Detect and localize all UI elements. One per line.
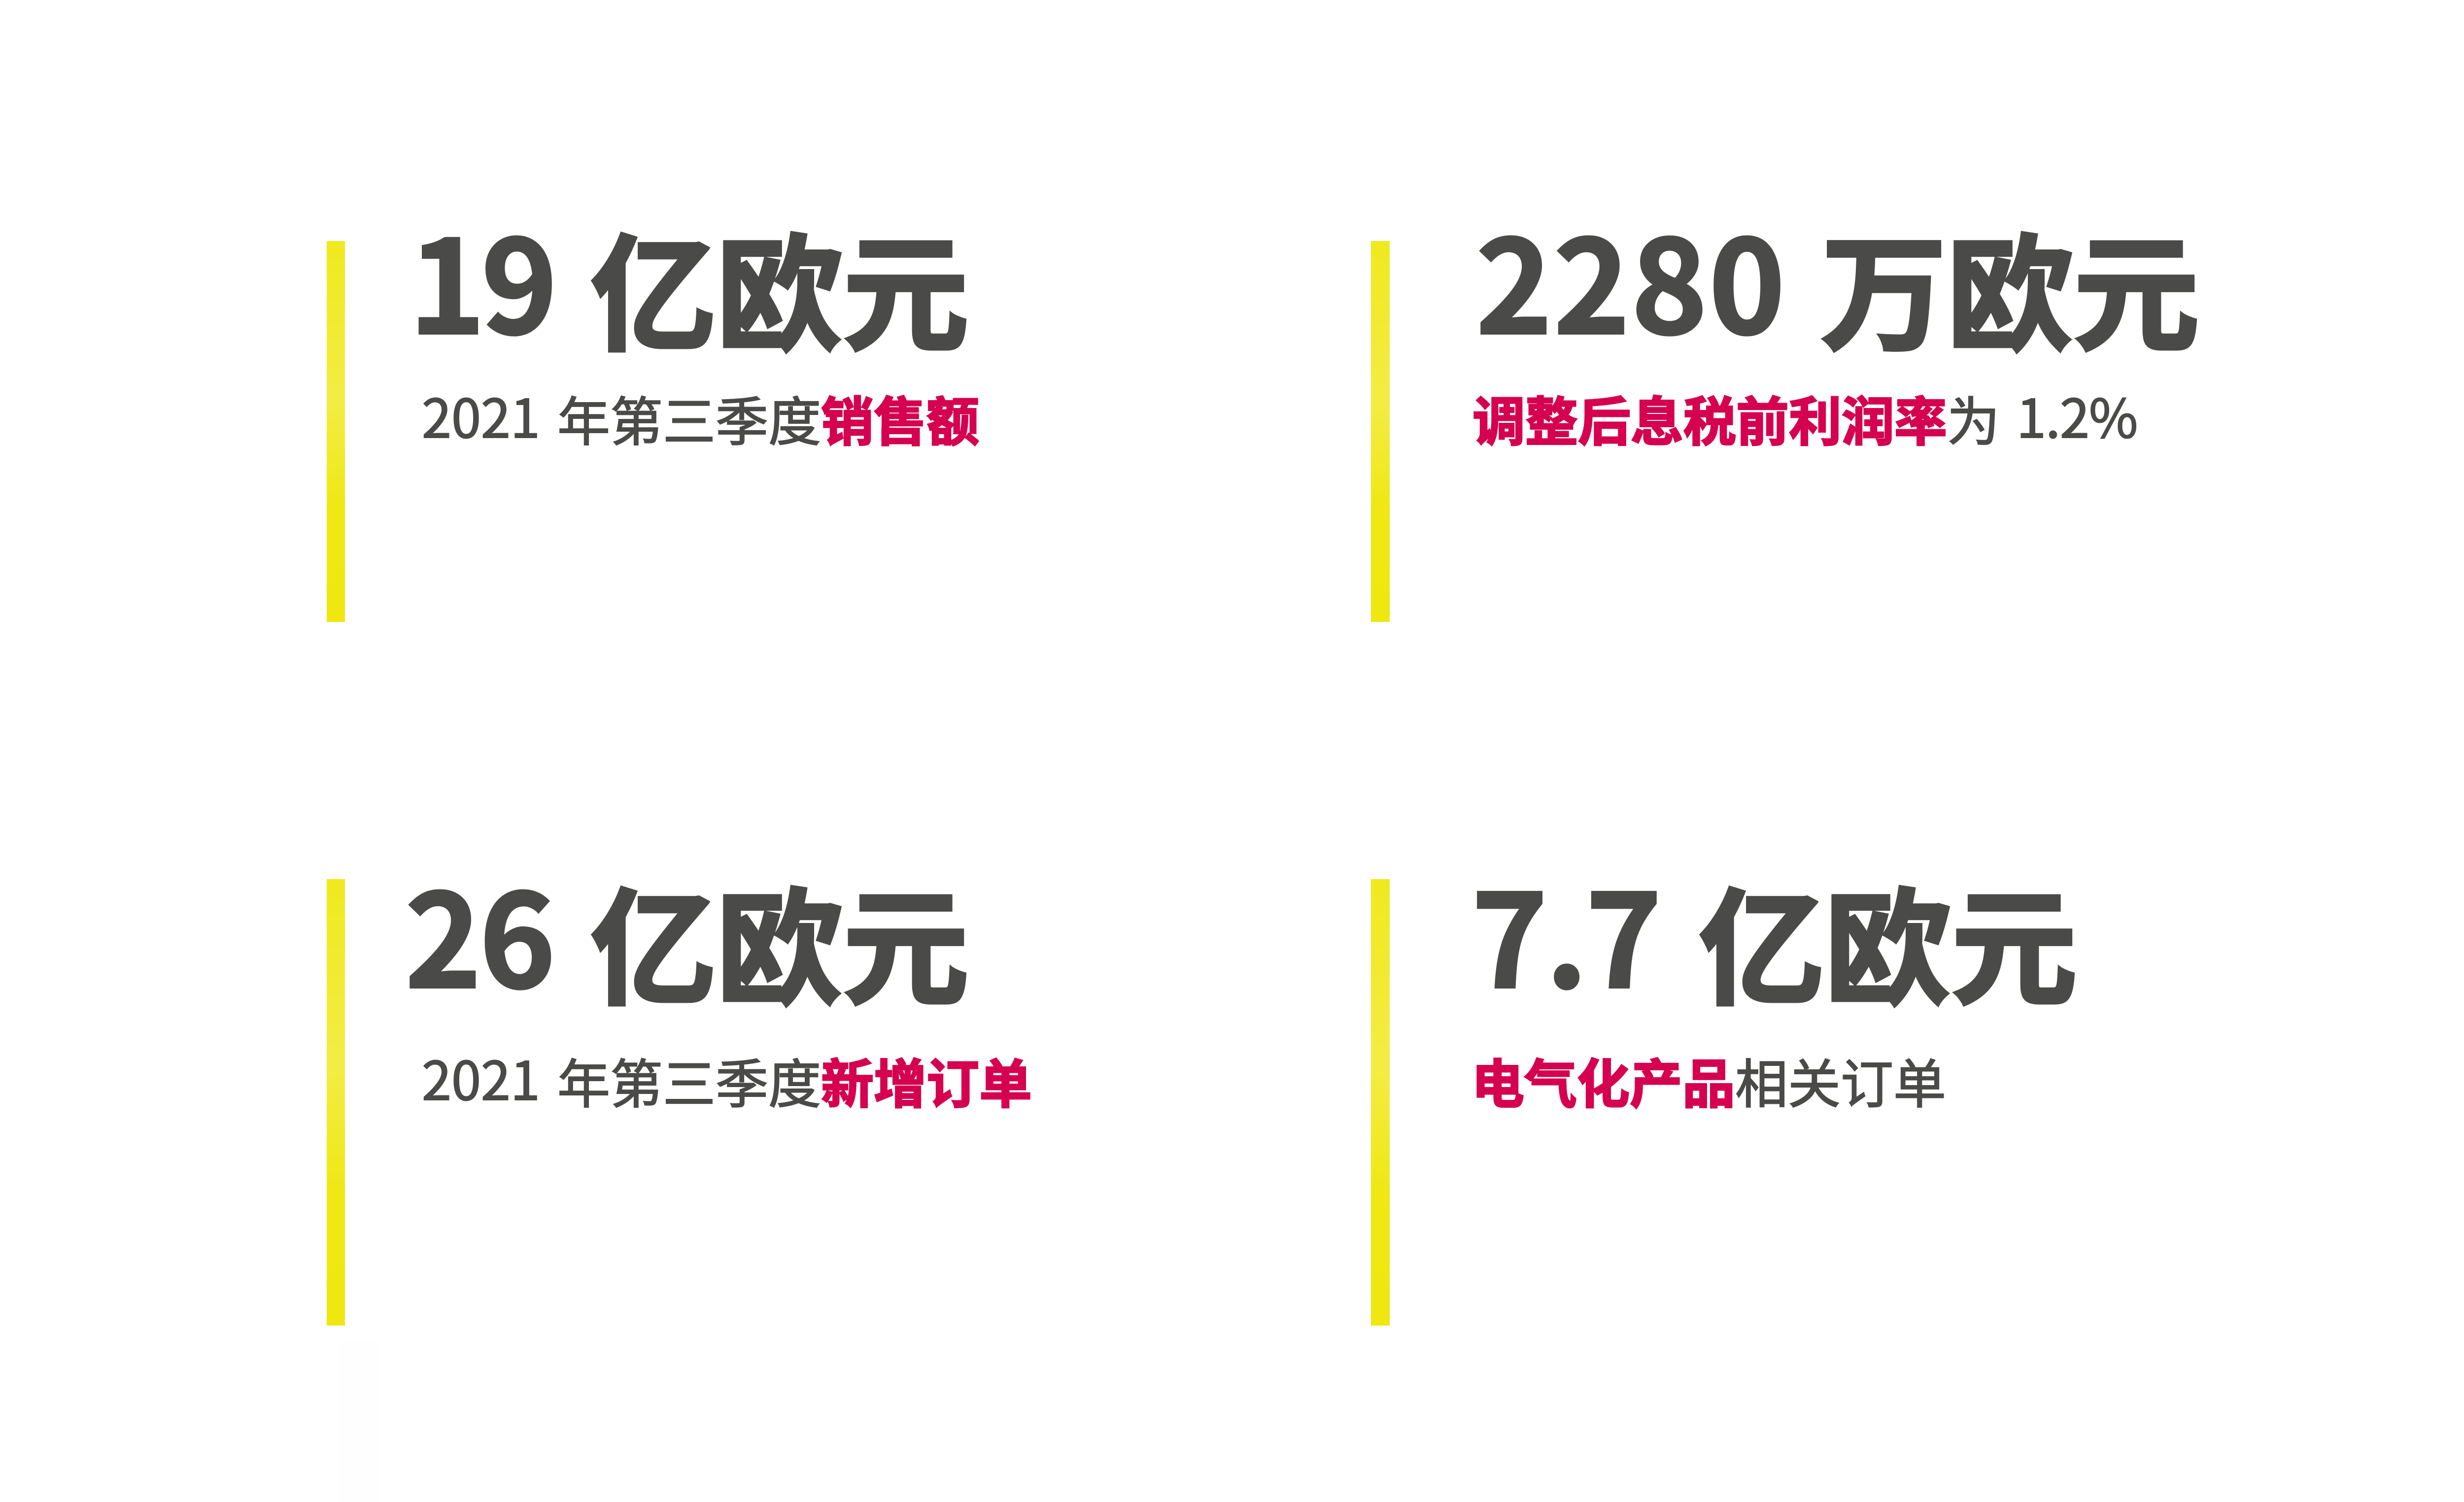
text: EBIT description: 调整后息税前利润率 (1472, 379, 1947, 456)
heading: EBIT figure: 2280 (1476, 184, 1786, 371)
text: EBIT description: 为 (1947, 379, 2000, 456)
heading: electrified figure: 亿欧元 (1699, 848, 2077, 1030)
heading: EBIT figure: 万欧元 (1821, 194, 2199, 376)
text: electrified description: 电气化产品 (1472, 1042, 1735, 1118)
heading: orders figure: 亿欧元 (590, 848, 969, 1030)
text: orders description: 2021 (422, 1039, 540, 1116)
accent bar: orders (327, 879, 345, 1326)
accent bar: electrified (1371, 879, 1390, 1326)
accent bar: sales (327, 241, 345, 622)
panel: sales (327, 184, 979, 622)
panel: adjusted EBIT margin (1371, 184, 2199, 622)
text: electrified description: 相关订单 (1735, 1042, 1946, 1118)
text: orders description: 年第三季度 (557, 1042, 821, 1118)
heading: electrified figure: 7.7 (1472, 838, 1660, 1025)
text: sales description: 年第三季度 (557, 379, 821, 456)
panel: electrified orders (1371, 838, 2077, 1326)
heading: orders figure: 26 (405, 838, 553, 1025)
text: sales description: 2021 (422, 376, 540, 453)
text: orders description: 新增订单 (821, 1042, 1032, 1118)
text: sales description: 销售额 (821, 379, 979, 456)
heading: sales figure: 19 (409, 184, 553, 371)
panel: new orders (327, 838, 1032, 1326)
accent bar: EBIT (1371, 241, 1390, 622)
faint background patch (339, 1340, 378, 1502)
text: EBIT description: 1.2% (2017, 376, 2137, 453)
heading: sales figure: 亿欧元 (590, 194, 969, 376)
